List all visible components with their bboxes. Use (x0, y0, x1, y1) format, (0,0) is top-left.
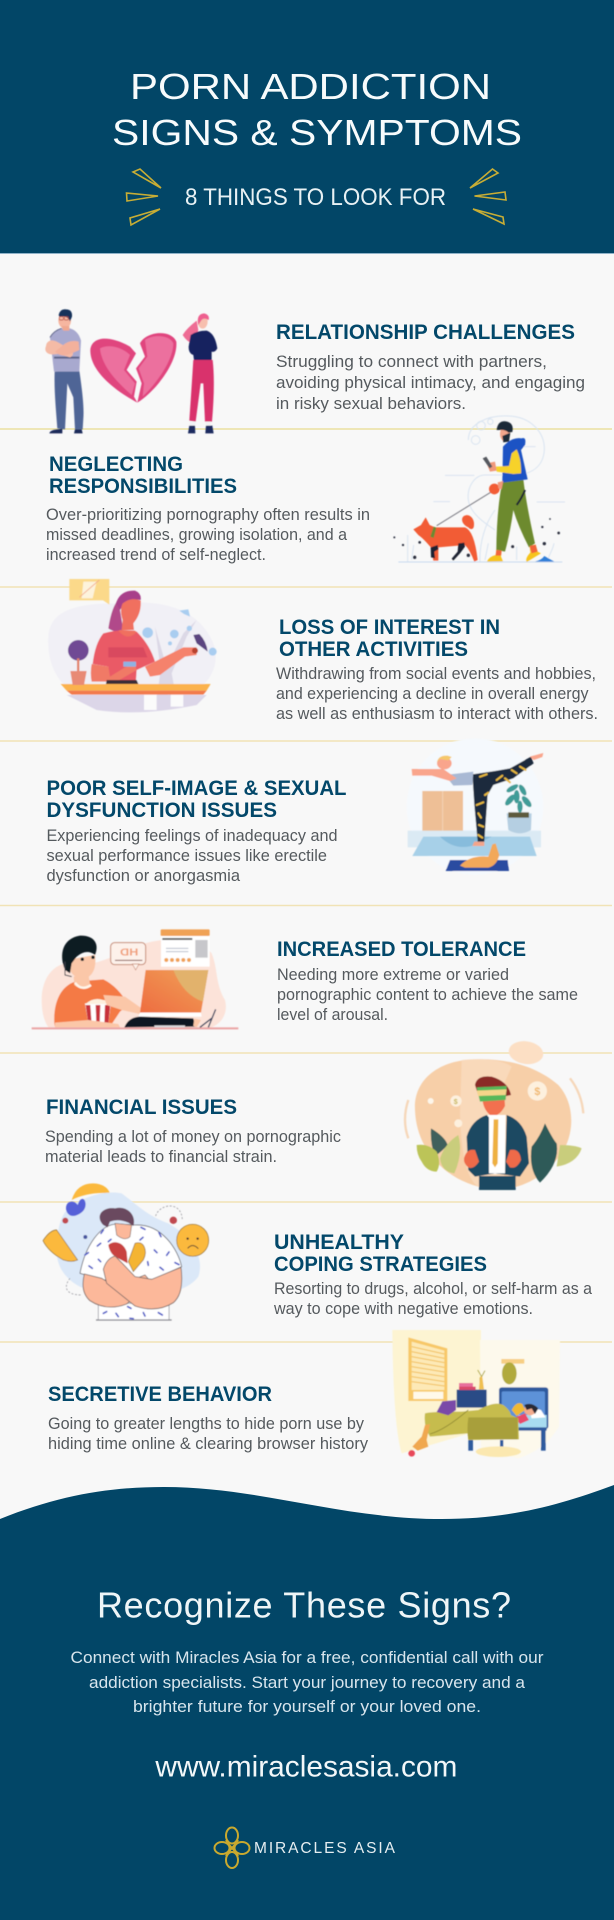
body text: Needing more extreme or varied (277, 966, 509, 984)
body text: Spending a lot of money on pornographic (45, 1128, 341, 1146)
illustration: person hugging broken heart (43, 1183, 209, 1320)
panel: footer call to action (0, 1485, 614, 1920)
body text: Withdrawing from social events and hobbies, (276, 665, 596, 683)
body text: pornographic content to achieve the same (277, 986, 578, 1004)
body text: avoiding physical intimacy, and engaging (276, 374, 585, 392)
body text: Struggling to connect with partners, (276, 353, 547, 371)
body text (48, 1415, 369, 1453)
panel: increased tolerance (32, 929, 578, 1029)
heading: LOSS OF INTEREST IN (279, 616, 500, 639)
heading: UNHEALTHY (274, 1231, 404, 1254)
body text: level of arousal. (277, 1006, 388, 1024)
panel: header (0, 0, 614, 254)
illustration: woman with bird (48, 579, 217, 712)
body text: hiding time online & clearing browser history (48, 1435, 369, 1453)
icon: right burst (470, 169, 506, 224)
website url: www.miraclesasia.com (154, 1750, 457, 1784)
body text: Over-prioritizing pornography often results in (46, 506, 370, 524)
heading: POOR SELF-IMAGE & SEXUAL (46, 777, 347, 800)
illustration: man blindfolded by money: $ (534, 1086, 540, 1098)
heading (46, 777, 347, 822)
body text (276, 353, 585, 413)
panel: neglecting responsibilities (46, 416, 565, 564)
illustration: person at laptop with popcorn: HD (120, 948, 138, 959)
icon: left burst (126, 169, 161, 225)
heading: COPING STRATEGIES (274, 1253, 487, 1276)
illustration: bedroom with cat (392, 1330, 560, 1458)
illustration: yoga pose with cat (407, 738, 543, 875)
illustration: couple with broken heart (45, 309, 217, 433)
panel: poor self-image (46, 738, 543, 885)
footer text: addiction specialists. Start your journey to recovery and a (89, 1674, 526, 1692)
body text: way to cope with negative emotions. (273, 1300, 533, 1318)
heading: NEGLECTING (49, 453, 183, 476)
heading: RESPONSIBILITIES (49, 475, 237, 498)
title: PORN ADDICTION (130, 66, 491, 107)
illustration: man walking dog (393, 416, 565, 562)
icon: logo knot (214, 1828, 250, 1868)
body text (45, 1128, 341, 1166)
body text: and experiencing a decline in overall energy (276, 685, 589, 703)
body text: as well as enthusiasm to interact with others. (276, 705, 598, 723)
heading: INCREASED TOLERANCE (277, 938, 526, 961)
title (112, 66, 522, 153)
body text (277, 966, 578, 1024)
heading: DYSFUNCTION ISSUES (46, 799, 277, 822)
footer text (70, 1649, 544, 1716)
heading (279, 616, 500, 661)
body text: dysfunction or anorgasmia (46, 867, 241, 885)
body text: increased trend of self-neglect. (46, 546, 266, 564)
panel: financial issues (45, 1039, 583, 1190)
body text: Experiencing feelings of inadequacy and (46, 827, 338, 845)
panel: relationship challenges (45, 309, 585, 433)
illustration: person at laptop with popcorn (32, 929, 238, 1029)
body text: material leads to financial strain. (45, 1148, 277, 1166)
body text: sexual performance issues like erectile (46, 847, 327, 865)
footer text: brighter future for yourself or your loved one. (133, 1698, 481, 1716)
heading: OTHER ACTIVITIES (279, 638, 468, 661)
illustration: man blindfolded by money (405, 1039, 583, 1190)
footer heading: Recognize These Signs? (97, 1584, 511, 1626)
panel: loss of interest (48, 579, 598, 723)
body text (46, 506, 370, 564)
heading (274, 1231, 487, 1276)
body text: Going to greater lengths to hide porn use by (48, 1415, 365, 1433)
logo wordmark: MIRACLES ASIA (254, 1840, 396, 1857)
body text: missed deadlines, growing isolation, and a (46, 526, 348, 544)
body text (46, 827, 338, 885)
subtitle: 8 THINGS TO LOOK FOR (185, 184, 446, 211)
heading: SECRETIVE BEHAVIOR (48, 1383, 272, 1406)
panel: secretive behavior (48, 1330, 560, 1458)
heading (49, 453, 237, 498)
illustration: man blindfolded by money: $ (454, 1097, 458, 1106)
heading: RELATIONSHIP CHALLENGES (276, 321, 575, 344)
body text: Resorting to drugs, alcohol, or self-harm as a (274, 1280, 593, 1298)
body text (273, 1280, 593, 1318)
footer text: Connect with Miracles Asia for a free, confidential call with our (70, 1649, 544, 1667)
heading: FINANCIAL ISSUES (46, 1096, 237, 1119)
panel: unhealthy coping strategies (43, 1183, 593, 1320)
body text (276, 665, 598, 723)
title: SIGNS & SYMPTOMS (112, 112, 522, 153)
body text: in risky sexual behaviors. (276, 395, 466, 413)
